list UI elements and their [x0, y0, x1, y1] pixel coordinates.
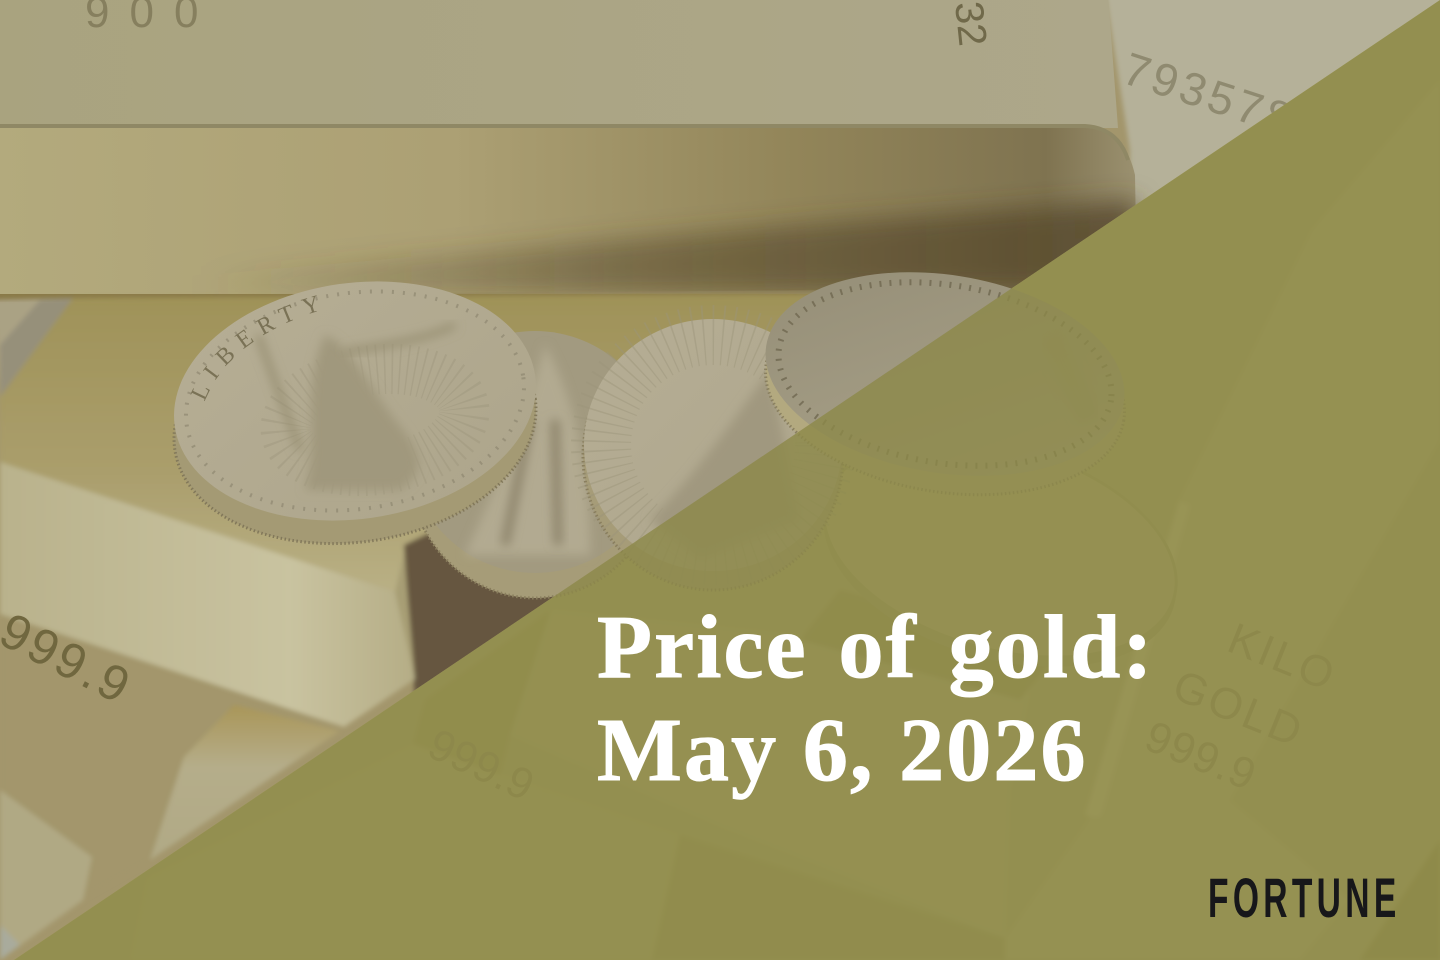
Fortune logo: FORTUNE — [1208, 866, 1401, 929]
title line 2: May 6, 2026 — [597, 701, 1088, 800]
stamped number on top bar: 32 — [946, 0, 994, 48]
stamped text on lower-right bar — [1138, 614, 1344, 800]
coin: center right — [583, 319, 843, 590]
coin: behind center — [409, 331, 661, 598]
coin legend: LIBERTY — [190, 295, 317, 401]
coin: large left Liberty — [172, 281, 538, 546]
purity stamp: 999.9 — [1138, 712, 1263, 800]
gold bar: top — [0, 0, 1140, 302]
title — [597, 598, 1155, 800]
coin: lower, behind overlay — [798, 401, 1202, 705]
serial number on far bar: 793578 — [1117, 42, 1302, 146]
coin: top right Liberty — [751, 248, 1139, 519]
gold bar: middle left — [0, 294, 840, 960]
stamped text under overlay lower center: 999.9 — [421, 720, 541, 811]
gold bar: far right background — [1105, 0, 1440, 300]
GOLD stamp: GOLD — [1166, 661, 1311, 757]
KILO stamp: KILO — [1221, 614, 1344, 701]
title line 1: Price of gold: — [597, 598, 1155, 697]
